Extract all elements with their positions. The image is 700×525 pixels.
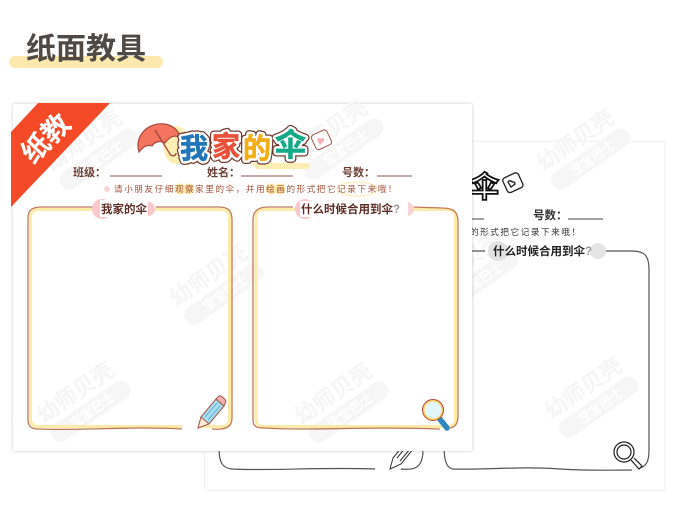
watermark back middle: 宝宝巴士 (455, 259, 506, 301)
icon: magnifier (422, 400, 447, 428)
title: 我家的伞: 伞 (275, 128, 306, 163)
watermark back middle (420, 225, 522, 315)
back title fragment: 伞 (470, 171, 499, 204)
back number field: 号数： (533, 208, 568, 222)
watermark back bottom: 幼师贝壳 (540, 353, 627, 424)
label: 什么时候合用到伞? (295, 199, 414, 219)
icon: speech bubble with heart (310, 129, 333, 151)
watermark front bottom left: 宝宝巴士 (67, 389, 118, 431)
watermark back bottom (540, 351, 642, 441)
panel: back worksheet (black and white) (205, 103, 664, 490)
watermark front top left: 幼师贝壳 (40, 105, 127, 176)
decoration: title yellow blobs (163, 126, 309, 169)
frame left (28, 207, 232, 429)
label: 什么时候合用到伞?: 什么时候合用到伞? (301, 202, 400, 216)
watermark front middle: 幼师贝壳 (165, 240, 252, 311)
ribbon: 纸教 (11, 103, 110, 207)
title: 我家的伞: 家 (212, 131, 240, 162)
frame right (253, 207, 458, 429)
watermark front top right: 幼师贝壳 (285, 95, 372, 166)
title: 我家的伞: 伞 (275, 128, 306, 163)
watermark front bottom right: 幼师贝壳 (290, 358, 377, 429)
watermark front top right (285, 93, 387, 183)
title: 我家的伞: 的 (243, 133, 271, 164)
label: 我家的伞 (92, 199, 155, 219)
watermark back top: 幼师贝壳 (532, 105, 619, 176)
instruction with highlights: 请小朋友仔细观察家里的伞，并用绘画的形式把它记录下来哦！ (114, 183, 398, 194)
class, name, number fields: 姓名： (207, 165, 240, 179)
ribbon: 纸教: 纸教 (15, 108, 77, 169)
icon: red umbrella (138, 124, 180, 156)
icon: pencil (182, 396, 226, 430)
watermark back top (532, 103, 634, 193)
class, name, number fields (73, 165, 412, 179)
panel: front worksheet (colour) (11, 93, 472, 451)
title: 我家的伞: 家 (212, 131, 240, 162)
title: 我家的伞: 我 (180, 133, 208, 164)
instruction with highlights (104, 182, 398, 196)
icon: back magnifier (614, 442, 642, 469)
back frame right (444, 251, 649, 470)
watermark back top: 宝宝巴士 (567, 137, 618, 179)
icon: back speech bubble (502, 172, 524, 194)
title: 我家的伞: 我 (180, 133, 208, 164)
watermark back middle: 幼师贝壳 (420, 227, 507, 298)
watermark front bottom right (290, 356, 392, 446)
title: 我家的伞 (180, 128, 306, 164)
heading: 纸面教具: 纸面教具 (26, 33, 146, 66)
back label: 什么时候合用到伞? (493, 244, 592, 258)
back label (488, 241, 606, 261)
icon: back pencil (390, 442, 414, 469)
label: 我家的伞: 我家的伞 (101, 202, 147, 216)
watermark front bottom left: 幼师贝壳 (32, 357, 119, 428)
watermark back bottom: 宝宝巴士 (575, 385, 626, 427)
title: 我家的伞: 的 (243, 133, 271, 164)
watermark front top left (40, 103, 142, 193)
class, name, number fields: 号数： (342, 165, 375, 179)
title: 我家的伞: 伞 (275, 128, 306, 163)
class, name, number fields: 班级： (73, 165, 106, 179)
watermark front top right: 宝宝巴士 (320, 127, 371, 169)
watermark front middle (165, 238, 267, 328)
watermark front bottom left (32, 355, 134, 445)
watermark front bottom right: 宝宝巴士 (325, 390, 376, 432)
watermark front middle: 宝宝巴士 (200, 272, 251, 314)
back instruction: 的形式把它记录下来哦！ (470, 226, 582, 237)
back frame left bottom (219, 448, 423, 470)
title: 我家的伞: 家 (212, 131, 240, 162)
title: 我家的伞: 的 (243, 133, 271, 164)
title: 我家的伞: 我 (180, 133, 208, 164)
watermark front top left: 宝宝巴士 (75, 137, 126, 179)
